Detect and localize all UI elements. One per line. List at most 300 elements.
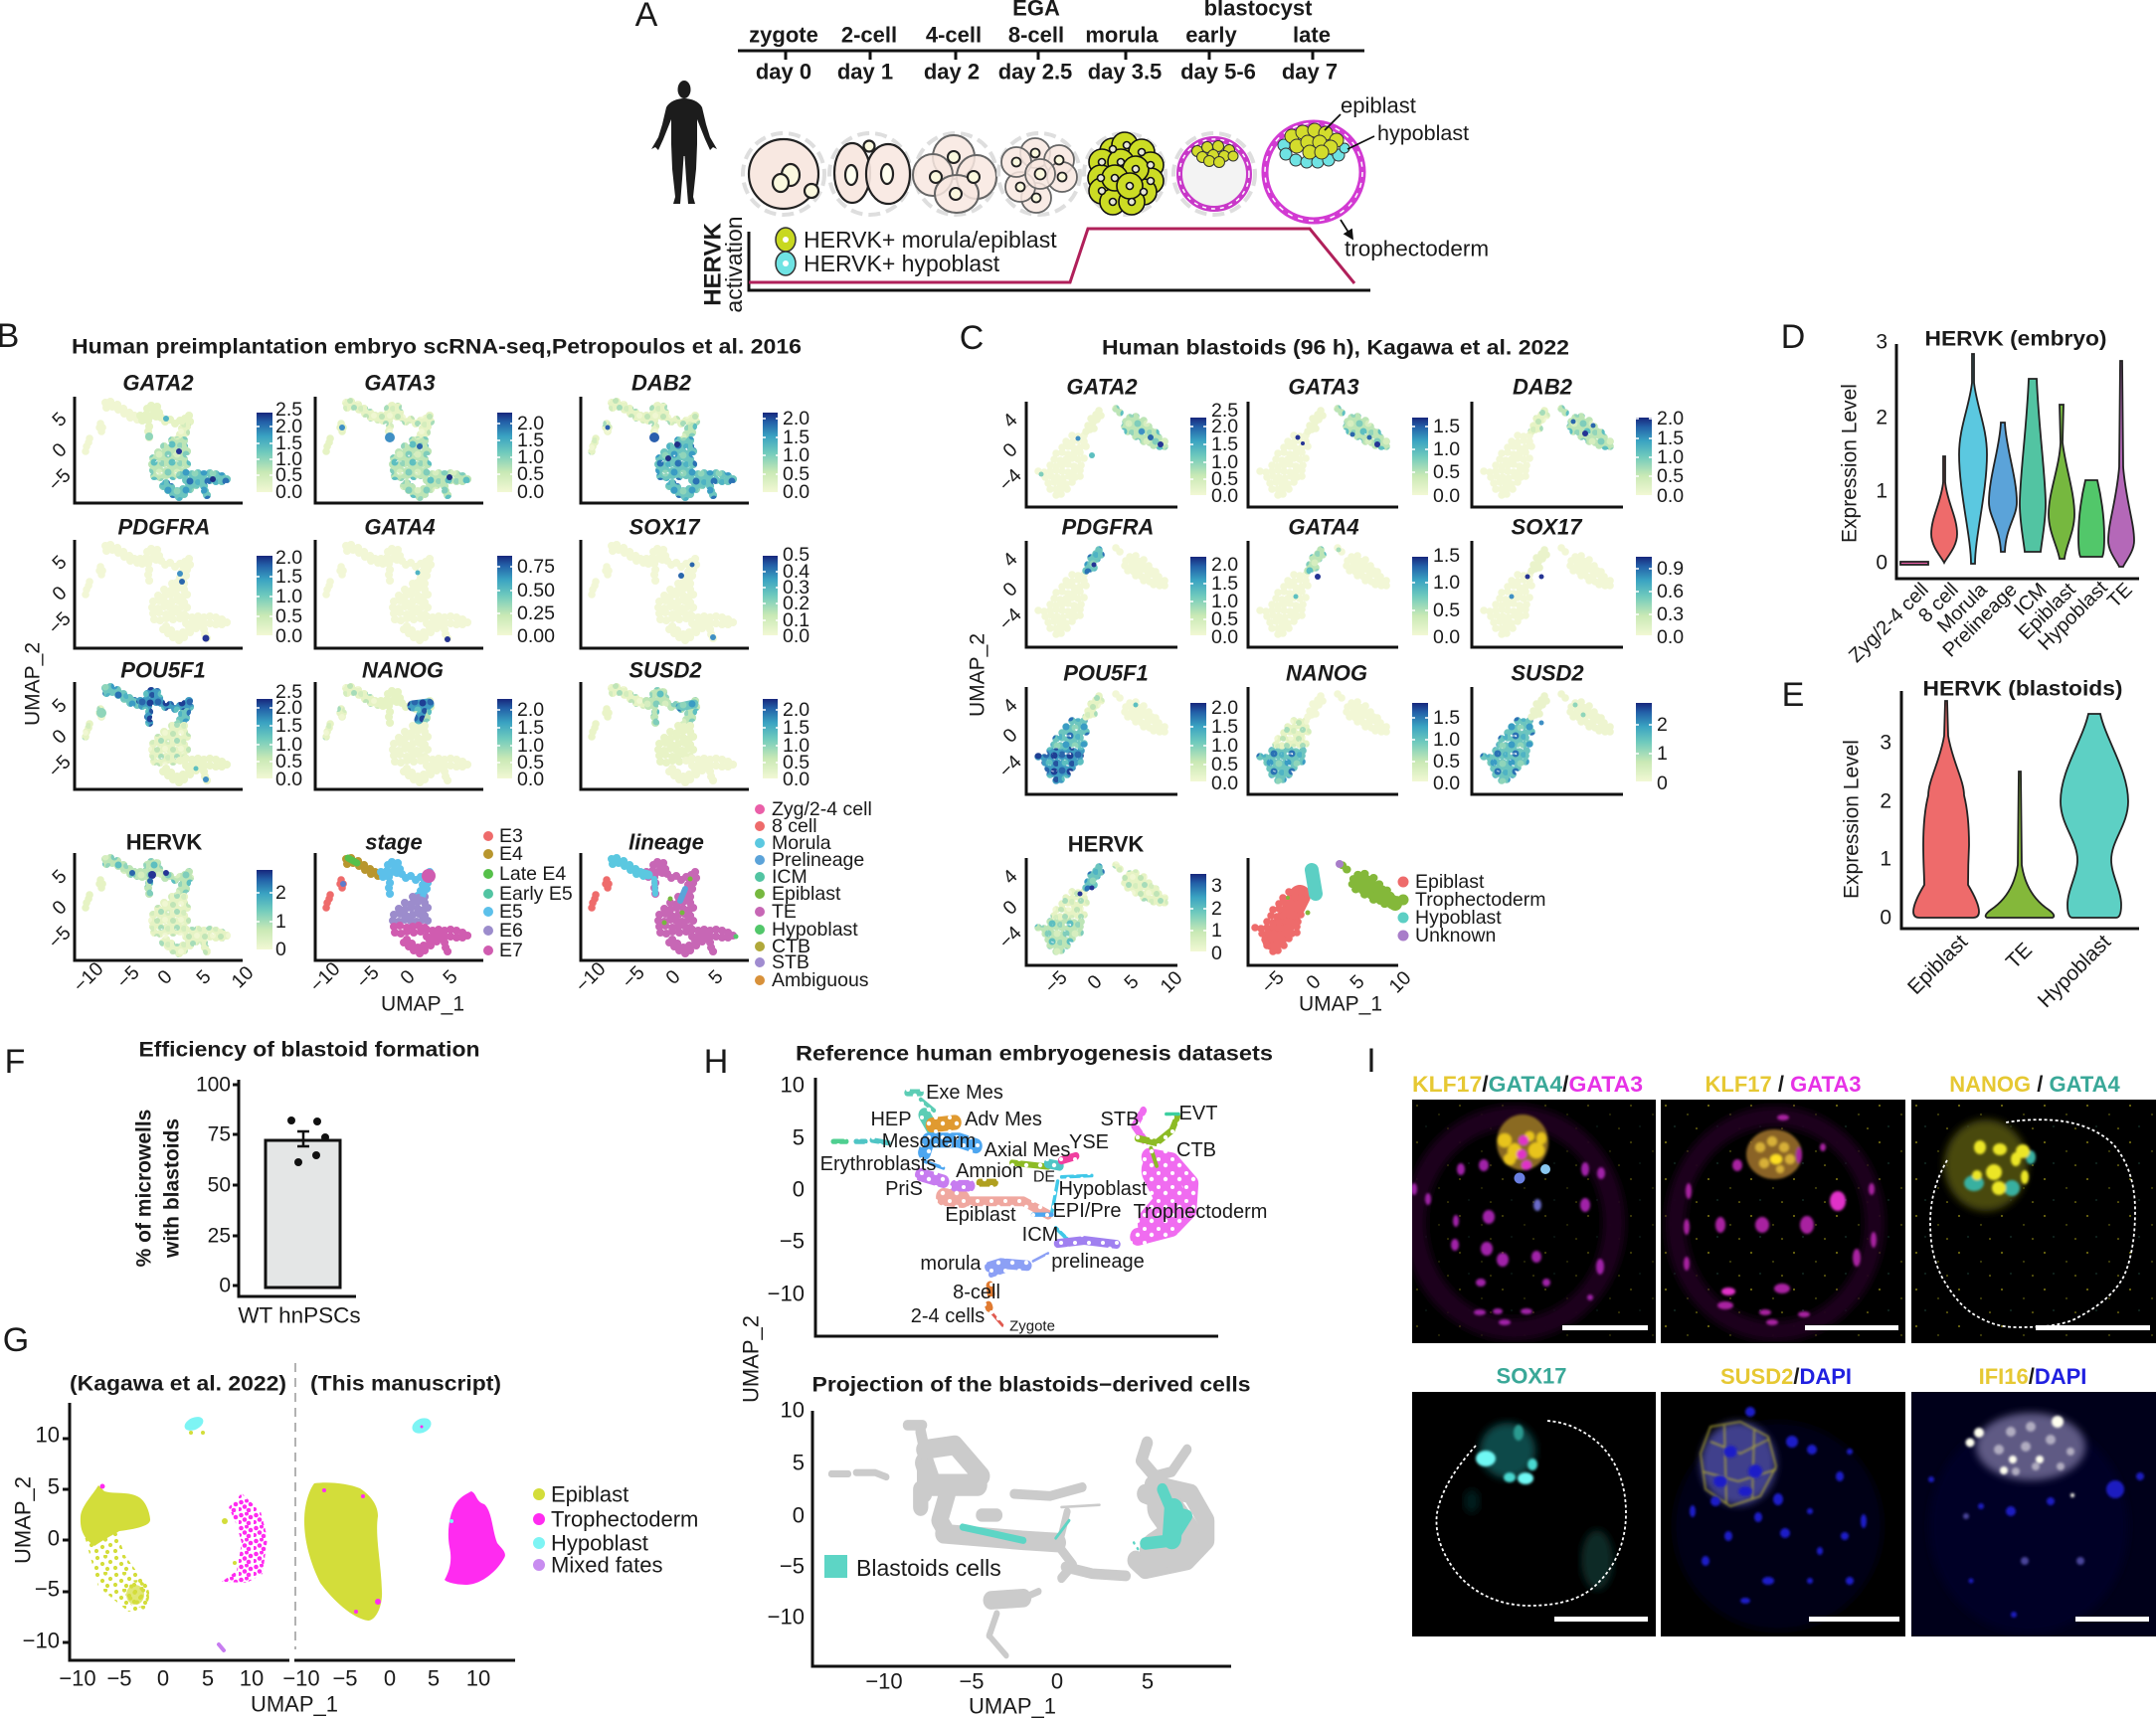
y tick labels <box>196 1074 231 1296</box>
x tick labels: 5 <box>428 1666 440 1690</box>
projected gray reference cells <box>831 1425 1206 1655</box>
image: IFI16 DAPI <box>1911 1392 2156 1636</box>
heading: this manuscript: (This manuscript) <box>310 1372 501 1396</box>
HERVK activation y axis title: activation <box>721 216 747 313</box>
plot: POU5F1: 2.0 <box>275 697 302 719</box>
plot: GATA2: 1.5 <box>1211 433 1238 455</box>
plot: PDGFRA: 0 <box>998 578 1022 602</box>
y tick labels: projection plot <box>768 1398 805 1629</box>
y tick labels: projection plot: −10 <box>768 1605 805 1629</box>
x tick labels: −10 <box>282 1666 320 1690</box>
y tick labels: 10 <box>36 1422 60 1448</box>
plot: GATA3: 0.5 <box>517 463 544 485</box>
x tick labels: projection plot: 5 <box>1142 1668 1154 1694</box>
y tick labels: 0 <box>48 1525 60 1551</box>
plot: GATA4: 0.00 <box>517 625 555 647</box>
plot: POU5F1: 4 <box>998 694 1022 718</box>
panel D heading: HERVK (embryo) <box>1925 328 2106 350</box>
plot: HERVK blastoid UMAP: 4 <box>998 865 1022 889</box>
panel C: blastoid UMAP feature plots <box>960 319 1684 1016</box>
plot: PDGFRA: 0.5 <box>1211 608 1238 630</box>
plot: SOX17: 0.4 <box>783 561 809 583</box>
plot: GATA3: 0.0 <box>1433 485 1460 507</box>
plot: GATA2: 0 <box>998 438 1022 462</box>
plot: GATA4: 0.5 <box>1433 600 1460 621</box>
image title: SUSD2/DAPI: SUSD2/DAPI <box>1720 1364 1852 1388</box>
cluster labels: Exe Mes <box>926 1082 1003 1104</box>
plot: GATA2 <box>44 370 302 503</box>
plot: PDGFRA: 4 <box>998 548 1022 572</box>
plot: POU5F1: 0.5 <box>275 751 302 773</box>
legend: blastoids cells: Blastoids cells <box>856 1555 1001 1581</box>
cluster labels: STB <box>1101 1109 1139 1130</box>
day labels: day 3.5 <box>1088 60 1162 84</box>
plot: GATA4 <box>1248 515 1460 648</box>
plot: SOX17: SOX17 <box>629 515 701 539</box>
stage labels: 4-cell <box>926 22 982 48</box>
plot: NANOG: 0.0 <box>1433 773 1460 794</box>
arrows to lineage labels <box>1325 114 1374 239</box>
plot: SUSD2: 2.0 <box>783 699 809 721</box>
axis titles <box>10 1476 338 1716</box>
plot: POU5F1: 0.0 <box>1211 773 1238 794</box>
axes and ticks <box>1896 344 2139 579</box>
embryo: late blastocyst <box>1265 123 1362 221</box>
panel letter G: G <box>3 1321 29 1359</box>
x tick labels: Epiblast <box>1903 931 1972 999</box>
legend: stage: E3 <box>499 825 523 847</box>
plot: POU5F1: 0 <box>48 725 72 749</box>
cluster labels: DE <box>1033 1169 1055 1185</box>
legend: stage: E7 <box>499 940 523 961</box>
x tick labels: projection plot <box>865 1668 1154 1694</box>
plot: GATA2: GATA2 <box>1066 374 1138 400</box>
plot: SUSD2: SUSD2 <box>629 658 702 682</box>
cluster labels: Trophectoderm <box>1134 1201 1267 1223</box>
embryo: 4-cell <box>913 133 996 215</box>
plot: GATA2 <box>994 374 1238 507</box>
legend: blastoid lineage: Hypoblast <box>1415 907 1502 929</box>
y tick labels: projection plot: 0 <box>793 1503 805 1527</box>
plot: stage UMAP: 5 <box>439 965 462 989</box>
plot: HERVK blastoid UMAP: 0 <box>998 896 1022 920</box>
stage labels: early <box>1185 22 1237 48</box>
plot: PDGFRA <box>44 515 302 648</box>
panel letter F: F <box>5 1043 25 1081</box>
plot: POU5F1: 1.5 <box>275 715 302 737</box>
plot: DAB2: 0.5 <box>783 463 809 485</box>
plot: POU5F1: POU5F1 <box>120 658 206 682</box>
legend <box>533 1481 698 1577</box>
x tick labels: Hypoblast <box>2034 577 2112 655</box>
lineage labels: epiblast <box>1341 93 1416 117</box>
legend: stage: E4 <box>499 843 523 865</box>
plot: SOX17: 0.5 <box>783 544 809 566</box>
plot: GATA2: 1.0 <box>275 448 302 470</box>
plot: HERVK blastoid UMAP: 3 <box>1211 875 1222 897</box>
plot: PDGFRA: 2.0 <box>1211 554 1238 576</box>
y tick labels <box>1876 330 1887 575</box>
legend: lineage: CTB <box>772 936 810 957</box>
legend: lineage: Zyg/2-4 cell <box>772 798 872 820</box>
image: SUSD2 DAPI <box>1661 1392 1905 1636</box>
plot: POU5F1: 1.5 <box>1211 716 1238 738</box>
plot: GATA3: 1.0 <box>1433 438 1460 460</box>
plot: SUSD2: 0.0 <box>783 769 809 790</box>
icon: human silhouette <box>651 81 717 204</box>
stage labels: zygote <box>749 22 818 48</box>
plot: NANOG: 2.0 <box>517 699 544 721</box>
plot: GATA3: GATA3 <box>364 370 436 396</box>
x tick labels: projection plot: −10 <box>865 1668 903 1694</box>
y tick labels: 3 <box>1876 330 1887 354</box>
panel H heading: Reference human embryogenesis datasets <box>796 1042 1273 1066</box>
plot: GATA2: −4 <box>994 464 1026 496</box>
embryo: early blastocyst <box>1173 133 1255 215</box>
stage labels: 8-cell <box>1008 22 1064 48</box>
plot: NANOG: 1.5 <box>517 717 544 739</box>
plot: GATA2: 0.5 <box>1211 468 1238 490</box>
plot: HERVK blastoid UMAP: −5 <box>1040 966 1072 998</box>
stage labels: late <box>1293 22 1331 48</box>
plot: GATA3: 1.0 <box>517 446 544 468</box>
plot: PDGFRA: 0.0 <box>1211 626 1238 648</box>
x tick labels: TE <box>2002 939 2037 973</box>
plot: PDGFRA: 1.0 <box>275 586 302 607</box>
y axis label <box>133 1110 183 1267</box>
plot: GATA3: 1.5 <box>517 430 544 451</box>
heading: Kagawa: (Kagawa et al. 2022) <box>70 1372 286 1396</box>
plot: SOX17 <box>1472 515 1684 648</box>
legend: lineage: STB <box>772 951 809 973</box>
plot: PDGFRA: −5 <box>44 607 76 639</box>
UMAP_1 axis label: UMAP_1 <box>969 1694 1056 1718</box>
HERVK activation y axis title <box>700 216 747 313</box>
plot: stage UMAP: −10 <box>306 957 345 996</box>
plot: stage UMAP: stage <box>365 829 423 855</box>
plot: HERVK embryo UMAP: 0 <box>48 896 72 920</box>
plot: PDGFRA: 0.0 <box>275 625 302 647</box>
y tick labels: 100 <box>196 1074 231 1096</box>
plot: HERVK embryo UMAP: 2 <box>275 882 286 904</box>
plot: GATA2: 2.5 <box>275 399 302 421</box>
plot: POU5F1: −4 <box>994 751 1026 782</box>
violins <box>1900 354 2134 567</box>
legend: lineage: Ambiguous <box>772 969 869 991</box>
day labels: day 5-6 <box>1180 60 1256 84</box>
projection heading: Projection of the blastoids−derived cells <box>811 1374 1251 1396</box>
scatter: Kagawa clusters <box>81 1414 268 1650</box>
plot: HERVK embryo UMAP: −5 <box>44 922 76 953</box>
plot: SOX17: 0.3 <box>783 577 809 599</box>
plot: GATA2: 0.0 <box>1211 485 1238 507</box>
day labels: day 0 <box>756 60 811 84</box>
plot: DAB2: 2.0 <box>1657 408 1684 430</box>
plot: blastoid lineage UMAP: −5 <box>1257 966 1289 998</box>
embryo: 8-cell <box>998 133 1080 215</box>
legend: stage <box>483 825 573 961</box>
cluster labels: EVT <box>1179 1103 1217 1124</box>
legend: Trophectoderm <box>551 1507 698 1531</box>
cluster labels: 2-4 cells <box>911 1305 985 1327</box>
y tick labels: 2 <box>1880 789 1891 813</box>
plot: HERVK blastoid UMAP <box>994 831 1222 998</box>
plot: SOX17: 0.9 <box>1657 558 1684 580</box>
violins <box>1913 701 2128 918</box>
embryo: zygote <box>743 133 824 215</box>
panel E: HERVK blastoid violin plot <box>1782 676 2139 1012</box>
plot: GATA2: 0.0 <box>275 481 302 503</box>
plot: POU5F1 <box>994 660 1238 794</box>
plot: stage UMAP: −5 <box>352 961 384 993</box>
y tick labels: reference plot: 10 <box>781 1072 805 1098</box>
lineage labels <box>1341 93 1489 260</box>
image title: SOX17: SOX17 <box>1497 1364 1566 1388</box>
plot: NANOG <box>315 658 544 790</box>
cluster labels: HEP <box>870 1109 912 1130</box>
plot: SOX17: SOX17 <box>1512 515 1583 539</box>
plot: HERVK embryo UMAP: 5 <box>48 865 72 889</box>
x tick labels: Zyg/2-4 cell <box>1845 579 1933 667</box>
day labels: day 2 <box>924 60 980 84</box>
y tick labels: 25 <box>208 1225 231 1247</box>
plot: SUSD2: 1.5 <box>783 717 809 739</box>
x label: WT hnPSCs <box>238 1302 361 1328</box>
plot: HERVK embryo UMAP <box>44 829 286 996</box>
cluster labels: Axial Mes <box>985 1139 1070 1161</box>
plot: NANOG <box>1248 660 1460 794</box>
legend: lineage: Morula <box>772 832 831 854</box>
day labels: day 7 <box>1282 60 1338 84</box>
error bar <box>297 1131 309 1146</box>
y axis label: Expression Level <box>1838 384 1862 543</box>
plot: DAB2: 0.0 <box>783 481 809 503</box>
x tick labels: Hypoblast <box>2034 931 2115 1012</box>
y tick labels: 5 <box>48 1473 60 1499</box>
y tick labels: 1 <box>1876 479 1887 503</box>
legend: blastoid lineage: Trophectoderm <box>1415 889 1546 911</box>
lineage labels: trophectoderm <box>1345 237 1489 260</box>
plot: DAB2: 1.5 <box>1657 428 1684 449</box>
panel B heading: Human preimplantation embryo scRNA-seq,Petropoulos et al. 2016 <box>72 336 802 358</box>
projected blastoid cells <box>963 1489 1187 1552</box>
cluster labels: morula <box>920 1253 982 1275</box>
axes <box>233 1080 356 1296</box>
plot: POU5F1: 1.0 <box>275 734 302 756</box>
legend: lineage: TE <box>772 901 797 923</box>
panel letter I: I <box>1366 1042 1376 1080</box>
embryo: 2-cell <box>829 133 911 215</box>
plot: HERVK embryo UMAP: −10 <box>70 957 108 996</box>
plot: POU5F1: 0 <box>998 724 1022 748</box>
x tick labels <box>1845 577 2137 667</box>
plot: GATA4: 0.75 <box>517 556 555 578</box>
plot: PDGFRA: PDGFRA <box>1062 515 1154 539</box>
plot: POU5F1: −5 <box>44 751 76 782</box>
x tick labels: Epiblast <box>2015 579 2080 644</box>
lineage labels: hypoblast <box>1377 121 1469 145</box>
y axis label: % of microwells <box>133 1110 155 1267</box>
legend: Hypoblast <box>551 1531 648 1555</box>
data points <box>287 1117 329 1166</box>
y tick labels: projection plot: 10 <box>781 1398 805 1422</box>
x tick labels: TE <box>2103 579 2137 612</box>
y tick labels: 0 <box>1876 551 1887 575</box>
plot: SUSD2 <box>581 658 809 790</box>
plot: PDGFRA: PDGFRA <box>118 515 210 539</box>
plot: PDGFRA <box>994 515 1238 648</box>
plot: PDGFRA: 1.5 <box>275 566 302 588</box>
plot: GATA4: 1.0 <box>1433 572 1460 594</box>
legend: HERVK+ cells: HERVK+ morula/epiblast <box>804 227 1057 253</box>
HERVK activation axes <box>749 232 1370 290</box>
cluster labels: Adv Mes <box>965 1109 1042 1130</box>
panel letter H: H <box>704 1043 728 1081</box>
plot: GATA3: GATA3 <box>1288 374 1359 400</box>
image title: IFI16/DAPI: IFI16/DAPI <box>1979 1364 2086 1388</box>
plot: HERVK blastoid UMAP: 1 <box>1211 920 1222 942</box>
axes and ticks <box>1901 691 2139 929</box>
x tick labels: projection plot: −5 <box>959 1668 985 1694</box>
legend: Epiblast <box>551 1481 629 1507</box>
legend: stage: Late E4 <box>499 863 566 885</box>
panel H: reference embryogenesis UMAP <box>704 1042 1273 1718</box>
plot: SOX17 <box>581 515 809 648</box>
UMAP_1 axis label: UMAP_1 <box>381 992 464 1016</box>
plot: GATA4 <box>315 515 555 648</box>
legend: HERVK+ cells: HERVK+ hypoblast <box>804 251 1000 276</box>
legend: lineage: Epiblast <box>772 883 841 905</box>
plot: SUSD2: 0 <box>1657 773 1668 794</box>
plot: NANOG: 1.5 <box>1433 707 1460 729</box>
plot: PDGFRA: 5 <box>48 551 72 575</box>
UMAP_2 axis label: UMAP_2 <box>738 1315 764 1403</box>
panel letter E: E <box>1782 676 1804 714</box>
plot: NANOG: 1.0 <box>1433 729 1460 751</box>
plot: HERVK blastoid UMAP: −4 <box>994 922 1026 953</box>
plot: blastoid lineage UMAP: 0 <box>1302 970 1326 994</box>
plot: NANOG: 0.0 <box>517 769 544 790</box>
scatter: this manuscript clusters <box>304 1415 505 1621</box>
x tick labels: 0 <box>157 1666 169 1690</box>
plot: NANOG: 0.5 <box>1433 751 1460 773</box>
x tick labels: 0 <box>384 1666 396 1690</box>
plot: GATA2: 1.5 <box>275 432 302 454</box>
legend: lineage: 8 cell <box>772 815 817 837</box>
cluster labels: Hypoblast <box>1059 1178 1148 1200</box>
axes: reference plot <box>815 1078 1218 1336</box>
plot: DAB2: 1.0 <box>1657 446 1684 468</box>
plot: DAB2 <box>1472 374 1684 507</box>
y tick labels: 50 <box>208 1173 231 1197</box>
plot: stage UMAP <box>306 829 483 996</box>
plot: GATA2: GATA2 <box>122 370 194 396</box>
y tick labels: reference plot: −5 <box>780 1229 805 1253</box>
plot: GATA2: −5 <box>44 464 76 496</box>
plot: SUSD2 <box>1472 660 1668 794</box>
plot: GATA2: 5 <box>48 408 72 431</box>
plot: NANOG: NANOG <box>362 658 444 682</box>
plot: DAB2: DAB2 <box>1513 374 1573 400</box>
plot: GATA3 <box>1248 374 1460 507</box>
image: KLF17 GATA3 <box>1661 1100 1905 1343</box>
HERVK activation y axis title: HERVK <box>700 223 726 306</box>
x tick labels: −5 <box>332 1666 358 1690</box>
plot: HERVK embryo UMAP: 5 <box>192 965 216 989</box>
stage labels: morula <box>1085 22 1159 48</box>
plot: GATA4: GATA4 <box>1288 515 1359 539</box>
panel I: immunofluorescence images <box>1366 1042 2156 1636</box>
y tick labels: projection plot: 5 <box>793 1450 805 1475</box>
plot: SOX17: 0.0 <box>1657 626 1684 648</box>
plot: lineage UMAP: 0 <box>661 965 685 989</box>
day labels: day 1 <box>837 60 893 84</box>
stage labels <box>749 0 1331 48</box>
stage labels: 2-cell <box>841 22 897 48</box>
plot: GATA2: 0 <box>48 438 72 462</box>
plot: SOX17: 0.6 <box>1657 581 1684 602</box>
cluster labels: Zygote <box>1009 1318 1055 1334</box>
cluster labels: ICM <box>1022 1224 1058 1246</box>
plot: blastoid lineage UMAP <box>1248 858 1416 998</box>
plot: PDGFRA: 0.5 <box>275 605 302 627</box>
x tick labels: Prelineage <box>1939 579 2022 661</box>
cluster labels: CTB <box>1176 1139 1216 1161</box>
y tick labels: reference plot: −10 <box>768 1281 805 1306</box>
plot: GATA4: 0.0 <box>1433 626 1460 648</box>
plot: lineage UMAP: lineage <box>629 829 704 855</box>
plot: POU5F1: POU5F1 <box>1063 660 1149 686</box>
y tick labels <box>23 1422 60 1652</box>
plot: PDGFRA: 0 <box>48 582 72 605</box>
plot: POU5F1: 2.0 <box>1211 697 1238 719</box>
plot: SUSD2: 2 <box>1657 714 1668 736</box>
plot: HERVK embryo UMAP: −5 <box>112 961 144 993</box>
image title: KLF17/GATA4/GATA3: KLF17/GATA4/GATA3 <box>1412 1072 1643 1096</box>
bar <box>266 1140 340 1288</box>
panel letter C: C <box>960 319 984 357</box>
plot: GATA2: 2.0 <box>1211 416 1238 437</box>
HERVK activation curve <box>749 229 1354 283</box>
plot: HERVK blastoid UMAP: 10 <box>1157 966 1187 997</box>
axis titles: UMAP_2 <box>10 1476 36 1564</box>
cluster labels: YSE <box>1069 1131 1109 1153</box>
x tick labels: −10 <box>59 1666 96 1690</box>
x tick labels: ICM <box>2010 579 2052 620</box>
plot: PDGFRA: 1.5 <box>1211 573 1238 595</box>
UMAP_2 axis label: UMAP_2 <box>22 642 44 726</box>
y tick labels: 3 <box>1880 732 1891 754</box>
legend: blastoid lineage: Epiblast <box>1415 871 1485 893</box>
plot: SUSD2: 0.5 <box>783 752 809 774</box>
plot: DAB2 <box>581 370 809 503</box>
x tick labels: 8 cell <box>1914 579 1963 627</box>
image: KLF17 GATA4 GATA3 <box>1412 1100 1656 1343</box>
y tick labels: −10 <box>23 1629 60 1652</box>
axes <box>63 1403 515 1660</box>
timeline axis <box>738 51 1364 60</box>
plot: GATA2: 4 <box>998 409 1022 432</box>
y tick labels: 1 <box>1880 847 1891 871</box>
plot: SOX17: 0.2 <box>783 593 809 614</box>
panel G: UMAP comparison <box>3 1321 698 1716</box>
legend: lineage: Hypoblast <box>772 919 858 941</box>
y tick labels: 2 <box>1876 406 1887 430</box>
legend: stage: E5 <box>499 901 523 923</box>
plot: GATA2: 2.0 <box>275 416 302 437</box>
plot: HERVK embryo UMAP: HERVK <box>126 829 202 855</box>
plot: HERVK embryo UMAP: 0 <box>153 965 177 989</box>
